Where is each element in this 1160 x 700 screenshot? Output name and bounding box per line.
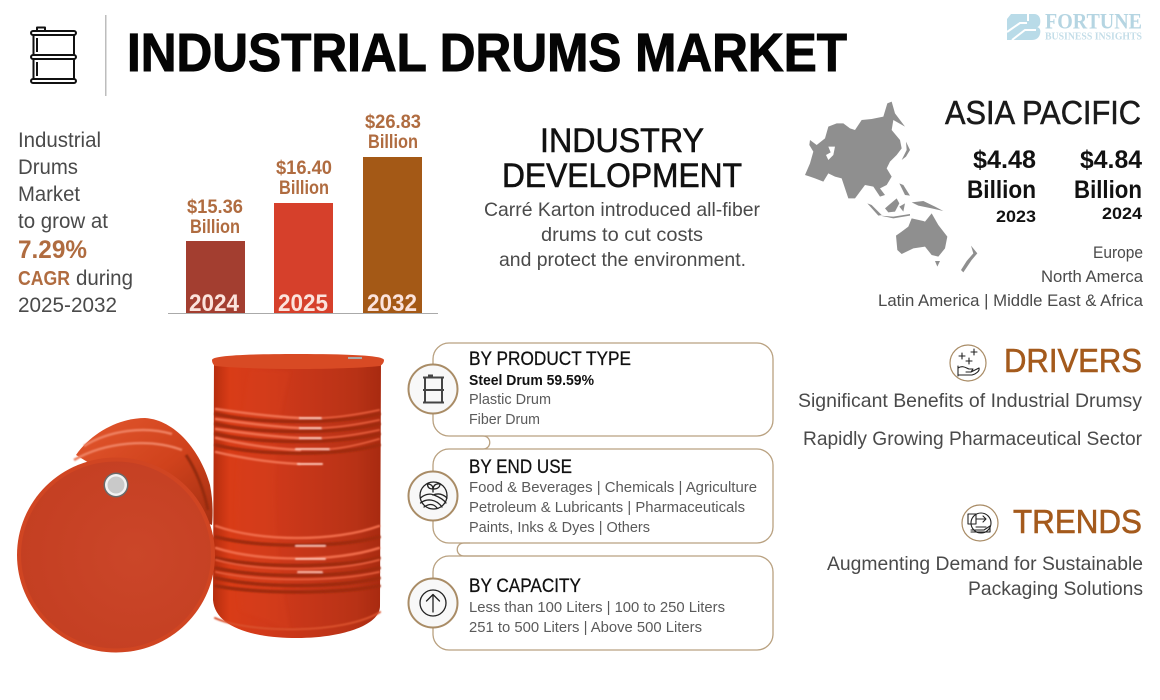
divider (105, 15, 106, 96)
mainland Asia (805, 102, 910, 198)
heading: ASIA PACIFIC (945, 94, 1141, 131)
card: by product type (408, 343, 773, 436)
card: by capacity: BY CAPACITY (469, 576, 581, 597)
heading: INDUSTRY (540, 122, 704, 160)
bar chart (168, 112, 438, 317)
CAGR text block: CAGR (18, 268, 70, 290)
description: drums to cut costs (541, 224, 703, 246)
value 2024: 2024 (1102, 205, 1143, 223)
value 2024 (1074, 146, 1143, 223)
map: Asia Pacific (805, 102, 977, 272)
illustration: red steel drums (17, 354, 384, 652)
card: by product type: Plastic Drum (469, 391, 551, 408)
CAGR text block: Market (18, 183, 80, 206)
icon: drum (408, 364, 458, 414)
card: by capacity: 251 to 500 Liters | Above 500 Liters (469, 619, 702, 636)
CAGR text block: during (76, 267, 133, 290)
trend text (827, 553, 1143, 600)
card: by capacity (408, 556, 773, 650)
description: Carré Karton introduced all-fiber (484, 199, 761, 221)
icon: hand with sparkles (950, 345, 986, 381)
description (484, 199, 761, 271)
card: by end use: Food & Beverages | Chemicals | Agriculture (469, 479, 757, 496)
trend text: Packaging Solutions (968, 578, 1143, 600)
CAGR text block: to grow at (18, 210, 108, 233)
panel: Asia Pacific statistics (878, 94, 1144, 310)
bar 2032 (363, 112, 422, 317)
value 2024: Billion (1074, 176, 1142, 204)
connectors (457, 436, 490, 556)
other regions: Latin America | Middle East & Africa (878, 291, 1144, 310)
card: by product type: Fiber Drum (469, 411, 540, 428)
bar 2025: 2025 (278, 290, 328, 317)
value 2023: Billion (967, 176, 1036, 204)
trend text: Augmenting Demand for Sustainable (827, 553, 1143, 575)
panel: segmentation (408, 343, 773, 650)
panel: drivers (798, 342, 1142, 450)
islands and Oceania (867, 183, 977, 272)
other regions: North Amerca (1041, 267, 1144, 286)
bar 2024: Billion (190, 217, 240, 238)
value 2023: $4.48 (973, 146, 1036, 174)
value 2023 (967, 146, 1036, 226)
logo: Fortune Business Insights: BUSINESS INSIGHTS (1045, 32, 1142, 42)
description: and protect the environment. (499, 249, 746, 271)
heading: DEVELOPMENT (502, 157, 742, 195)
CAGR text block: Drums (18, 156, 78, 179)
icon: up arrow (408, 578, 458, 628)
upper rolling hoops (216, 409, 379, 464)
heading: TRENDS (1013, 503, 1142, 540)
driver list: Rapidly Growing Pharmaceutical Sector (803, 428, 1142, 450)
CAGR text block: 2025-2032 (18, 294, 117, 317)
heading (502, 122, 742, 195)
bar 2024: 2024 (189, 290, 240, 317)
other regions (878, 243, 1144, 310)
title: INDUSTRIAL DRUMS MARKET (127, 23, 847, 83)
driver list (798, 390, 1142, 450)
card: by product type: BY PRODUCT TYPE (469, 349, 631, 370)
icon: drum (31, 28, 76, 83)
other regions: Europe (1093, 243, 1143, 262)
logo: Fortune Business Insights: FORTUNE (1045, 8, 1142, 34)
bar 2032: $26.83 (365, 112, 421, 133)
card: by capacity: Less than 100 Liters | 100 to 250 Liters (469, 599, 725, 616)
card: by end use (408, 449, 773, 543)
CAGR text block: 7.29% (18, 236, 87, 264)
value 2023: 2023 (996, 208, 1036, 226)
card: by product type: Steel Drum 59.59% (469, 373, 594, 389)
bar 2032: Billion (368, 132, 418, 153)
heading: DRIVERS (1004, 342, 1142, 379)
standing drum (212, 354, 384, 638)
bar 2032: 2032 (367, 290, 417, 317)
bar 2025: $16.40 (276, 158, 332, 179)
bar 2024: $15.36 (187, 197, 243, 218)
lower rolling hoops (215, 526, 380, 629)
lying drum (17, 418, 215, 652)
header (31, 15, 847, 96)
icon: globe with hands (962, 505, 998, 541)
panel: industry development (484, 122, 761, 271)
driver list: Significant Benefits of Industrial Drumsy (798, 390, 1142, 412)
icon: agriculture (408, 472, 458, 520)
bar 2025 (274, 158, 333, 317)
card: by end use: Paints, Inks & Dyes | Others (469, 519, 650, 536)
bar 2024 (186, 197, 245, 317)
card: by end use: Petroleum & Lubricants | Pharmaceuticals (469, 499, 745, 516)
bung cap (104, 472, 128, 498)
card: by end use: BY END USE (469, 457, 572, 478)
logo: Fortune Business Insights (1007, 8, 1142, 42)
CAGR text block (18, 129, 133, 317)
bar 2025: Billion (279, 178, 329, 199)
panel: trends (827, 503, 1143, 600)
value 2024: $4.84 (1080, 146, 1142, 174)
CAGR text block: Industrial (18, 129, 101, 152)
